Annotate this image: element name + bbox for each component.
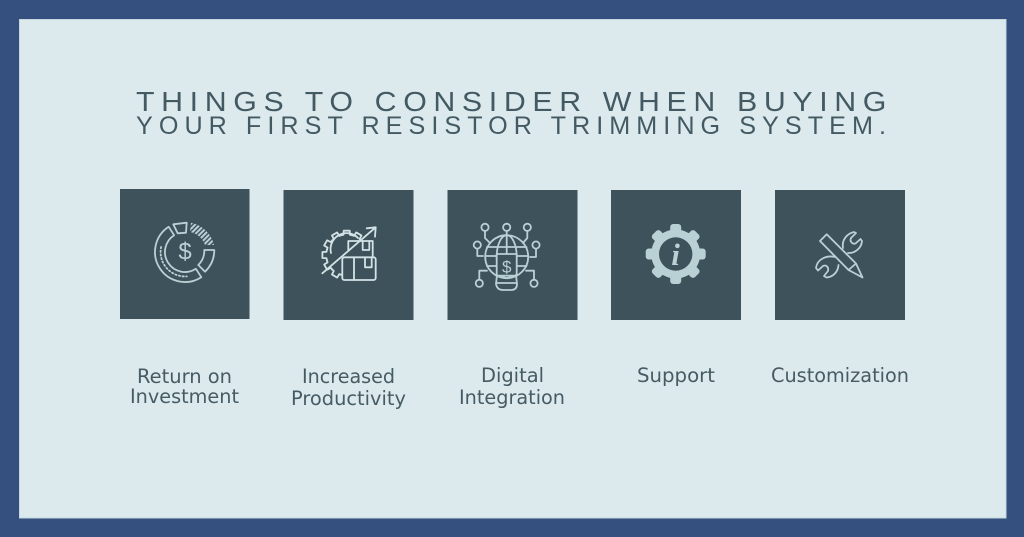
label: increased productivity: Increased [302,365,395,388]
title [136,86,893,140]
icon: gear with info symbol [646,224,706,284]
label: digital integration: Integration [459,386,565,409]
icon: dollar pie chart: $ [178,238,192,266]
card: support [611,190,741,320]
label: increased productivity [291,365,406,410]
label: increased productivity: Productivity [291,387,406,410]
icon: globe light bulb with nodes [474,224,540,290]
title: YOUR FIRST RESISTOR TRIMMING SYSTEM. [136,112,892,140]
icon: gear, boxes and arrow [322,227,376,280]
label: digital integration [459,364,565,409]
icon: dollar pie chart [155,223,214,282]
label: customization: Customization [771,364,909,387]
label: return on investment: Return on [137,365,232,388]
card: digital integration [448,190,578,320]
card: return on investment [120,189,250,319]
icon: globe light bulb with nodes: $ [502,258,512,276]
card: customization [775,190,905,320]
icon: gear with info symbol: i [671,237,680,272]
label: support: Support [637,364,715,387]
label: return on investment [130,365,239,408]
label: return on investment: Investment [130,385,239,408]
label: digital integration: Digital [481,364,544,387]
title: THINGS TO CONSIDER WHEN BUYING [136,86,893,117]
card: increased productivity [284,190,414,320]
icon: crossed pencil and wrench [816,232,862,278]
